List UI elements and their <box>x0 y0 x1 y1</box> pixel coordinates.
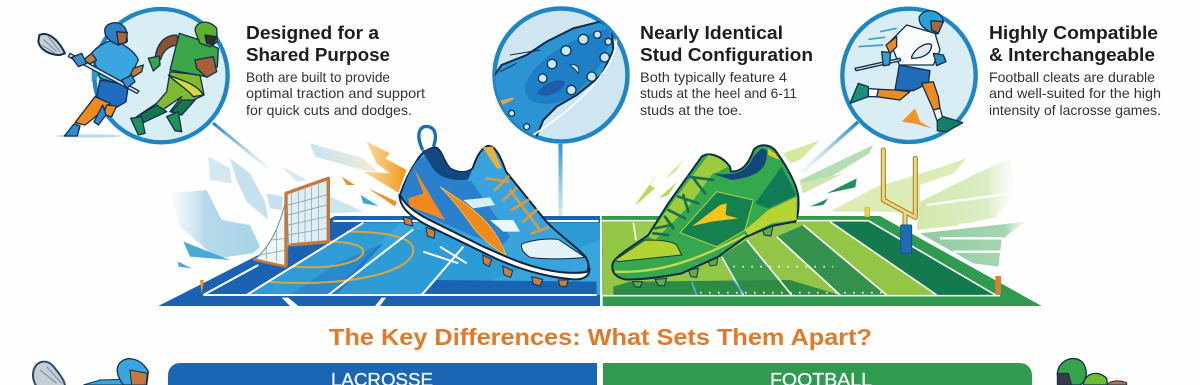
panel: football field <box>602 150 1042 306</box>
panel: circle shared purpose <box>38 9 228 142</box>
heading: stud configuration: Nearly Identical <box>640 22 783 43</box>
icon: lacrosse goal <box>253 178 328 267</box>
text: stud configuration body <box>640 69 797 118</box>
panel: circle compatible <box>842 9 976 142</box>
icon: bottom football player <box>1057 359 1127 385</box>
header: lacrosse column <box>168 363 597 385</box>
heading: stud configuration <box>640 22 813 65</box>
heading: shared purpose: Shared Purpose <box>246 44 390 65</box>
panel: lacrosse field <box>158 216 600 306</box>
icon: lacrosse runner <box>850 11 963 132</box>
text: stud configuration body: studs at the heel and 6-11 <box>640 85 797 101</box>
icon: football player <box>131 22 218 135</box>
header: football column <box>603 363 1032 385</box>
text: stud configuration body: Both typically feature 4 <box>640 69 787 85</box>
heading: compatible <box>989 22 1158 65</box>
text: shared purpose body <box>246 69 425 118</box>
text: compatible body: and well-suited for the high <box>989 85 1161 101</box>
heading: shared purpose: Designed for a <box>246 22 380 43</box>
text: compatible body <box>989 69 1161 118</box>
background shards: lacrosse side <box>170 142 407 268</box>
pylons <box>865 208 1001 295</box>
heading: stud configuration: Stud Configuration <box>640 44 813 65</box>
background shards: football side <box>635 140 1027 267</box>
circle ring <box>842 9 976 142</box>
sole <box>399 180 589 279</box>
icon: bottom lacrosse player <box>33 359 148 385</box>
text: shared purpose body: for quick cuts and dodges. <box>246 102 412 118</box>
icon: cleat sole with studs <box>487 22 617 140</box>
heading: compatible: Highly Compatible <box>989 22 1158 43</box>
text: shared purpose body: optimal traction and support <box>246 85 425 101</box>
circle ring <box>94 9 228 142</box>
section title: The Key Differences: What Sets Them Apart? <box>329 324 872 350</box>
text: stud configuration body: studs at the toe. <box>640 102 742 118</box>
connector lines <box>213 122 858 232</box>
icon: goal post <box>883 150 915 253</box>
text: compatible body: Football cleats are durable <box>989 69 1155 85</box>
icon: football cleat <box>612 145 799 287</box>
heading: shared purpose <box>246 22 390 65</box>
heel loop <box>419 126 435 150</box>
circle ring <box>494 8 628 142</box>
upper <box>400 146 589 273</box>
heading: compatible: & Interchangeable <box>989 44 1155 65</box>
icon: lacrosse player <box>38 23 143 136</box>
icon: lacrosse cleat <box>399 126 589 287</box>
panel: circle stud configuration <box>487 8 628 142</box>
goal crease arcs <box>270 232 413 283</box>
text: shared purpose body: Both are built to provide <box>246 69 390 85</box>
text: compatible body: intensity of lacrosse games. <box>989 102 1161 118</box>
